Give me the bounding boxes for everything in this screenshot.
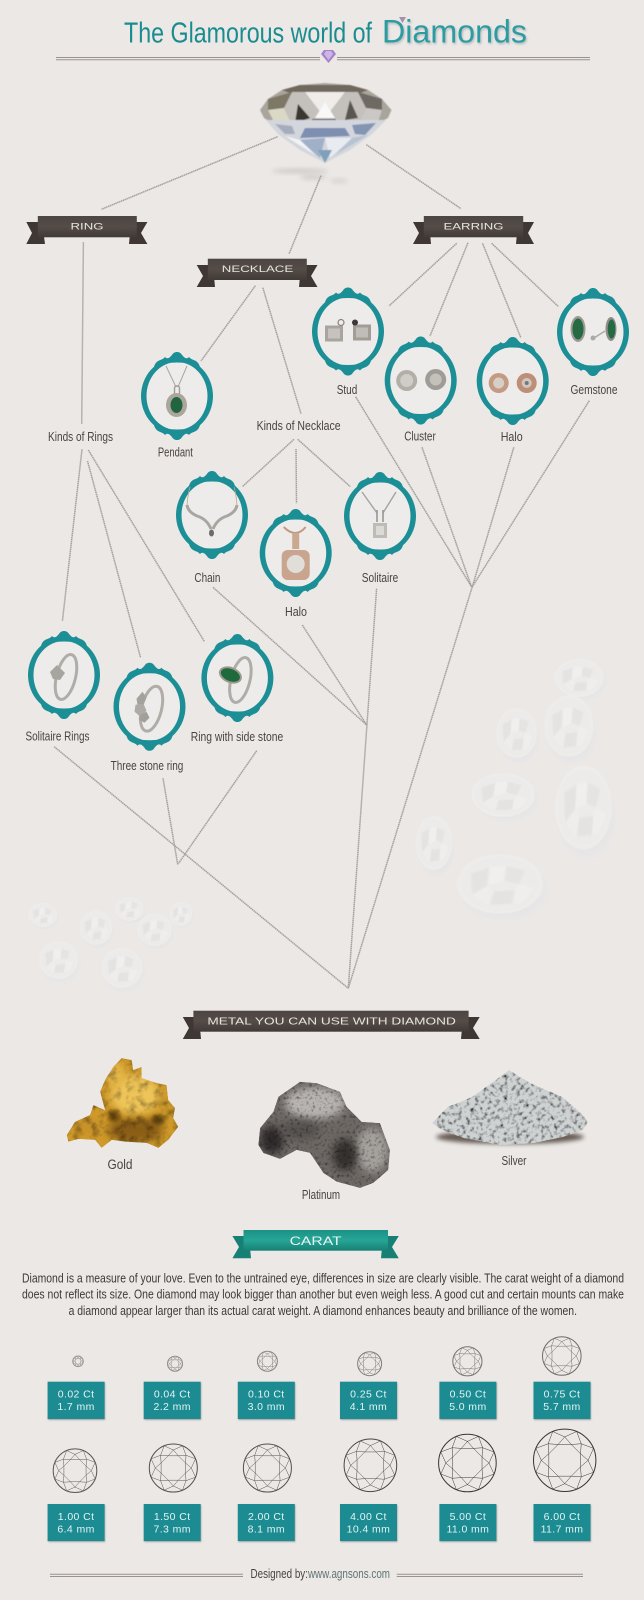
carat boxes, row 1: 5.7 mm: [543, 1401, 581, 1413]
banner: necklace: [197, 259, 318, 287]
label: gemstone: Gemstone: [570, 383, 618, 397]
carat boxes, row 1: 0.75 Ct: [544, 1388, 580, 1400]
carat boxes, row 1: 0.02 Ct: [58, 1388, 94, 1400]
connector lines: [54, 137, 589, 988]
main diamond image: [260, 83, 392, 184]
diamond cut size chart, row 1: [73, 1337, 581, 1376]
carat boxes, row 1: 4.1 mm: [350, 1401, 387, 1413]
carat boxes, row 2: [48, 1504, 591, 1541]
label: solitaire: Solitaire: [362, 571, 398, 585]
carat boxes, row 2: 11.7 mm: [541, 1524, 583, 1536]
label: solitaire rings: Solitaire Rings: [26, 730, 90, 744]
banner: ring: [26, 216, 147, 244]
carat boxes, row 2: 10.4 mm: [347, 1524, 390, 1536]
frame: solitaire ring: [28, 631, 100, 719]
metal: silver pile: [432, 1070, 588, 1145]
carat boxes, row 1: 3.0 mm: [248, 1401, 285, 1413]
banner: carat: [232, 1230, 399, 1258]
label: pendant: Pendant: [158, 446, 193, 460]
label: platinum: Platinum: [302, 1188, 340, 1202]
carat boxes, row 1: 0.50 Ct: [450, 1388, 486, 1400]
frame: gemstone earrings: [557, 288, 629, 376]
faded diamonds: left group: [29, 897, 193, 991]
carat boxes, row 2: 4.00 Ct: [350, 1511, 387, 1523]
label: chain: Chain: [194, 571, 220, 585]
frame: solitaire necklace: [344, 472, 416, 560]
carat boxes, row 1: 2.2 mm: [153, 1401, 191, 1413]
frame: stud earrings: [312, 288, 384, 376]
carat boxes, row 2: 5.00 Ct: [450, 1511, 486, 1523]
title: [124, 13, 527, 49]
title: The Glamorous world of: [124, 17, 372, 49]
frame: halo earrings: [477, 337, 549, 425]
label: earring halo: Halo: [501, 430, 523, 444]
banner: necklace: NECKLACE: [222, 264, 293, 275]
label: necklace halo: Halo: [285, 605, 307, 619]
frame: ring with side stone: [201, 634, 273, 722]
label: kinds of rings: Kinds of Rings: [48, 430, 113, 444]
carat boxes, row 2: 7.3 mm: [153, 1524, 191, 1536]
banner: earring: [413, 216, 534, 244]
carat boxes, row 2: 6.4 mm: [57, 1524, 95, 1536]
metal: platinum rock: [258, 1082, 390, 1188]
title: Diamonds: [382, 13, 527, 49]
faded diamonds: right group: [416, 660, 614, 919]
banner: earring: EARRING: [444, 222, 504, 232]
label: silver: Silver: [502, 1154, 526, 1168]
carat boxes, row 2: 6.00 Ct: [544, 1511, 580, 1523]
label: gold: Gold: [108, 1157, 132, 1172]
carat boxes, row 2: 2.00 Ct: [248, 1511, 285, 1523]
label: kinds of necklace: Kinds of Necklace: [257, 419, 341, 433]
footer credit: Designed by:www.agnsons.com: [250, 1567, 390, 1581]
frame: halo necklace: [260, 509, 332, 597]
label: stud: Stud: [337, 383, 357, 397]
banner: metal you can use with diamond: METAL YOU CAN USE WITH DIAMOND: [207, 1016, 456, 1028]
carat boxes, row 2: 8.1 mm: [248, 1524, 285, 1536]
icon: amethyst gem: [321, 50, 336, 63]
carat boxes, row 2: 1.50 Ct: [154, 1511, 191, 1523]
title rule: [56, 58, 590, 60]
carat paragraph: [22, 1272, 624, 1318]
carat boxes, row 1: [48, 1382, 591, 1419]
banner: carat: CARAT: [290, 1236, 342, 1248]
carat boxes, row 1: 0.04 Ct: [154, 1388, 191, 1400]
carat boxes, row 1: 5.0 mm: [449, 1401, 487, 1413]
carat boxes, row 1: 0.10 Ct: [248, 1388, 285, 1400]
frame: three stone ring: [114, 663, 186, 751]
banner: metal you can use with diamond: [183, 1011, 480, 1039]
diamond cut size chart, row 2: [53, 1429, 596, 1492]
label: ring with side stone: Ring with side stone: [191, 730, 283, 744]
carat boxes, row 1: 1.7 mm: [57, 1401, 95, 1413]
frame: pendant: [141, 352, 213, 440]
carat boxes, row 2: 1.00 Ct: [58, 1511, 94, 1523]
metal: gold nugget: [66, 1058, 178, 1148]
frame: cluster earrings: [385, 336, 457, 424]
icon: small gem on the i of Diamonds: [399, 17, 406, 23]
frame: chain necklace: [176, 471, 248, 559]
carat boxes, row 1: 0.25 Ct: [350, 1388, 387, 1400]
label: cluster: Cluster: [404, 430, 436, 444]
carat boxes, row 2: 11.0 mm: [446, 1524, 489, 1536]
label: three stone ring: Three stone ring: [111, 759, 183, 773]
banner: ring: RING: [70, 222, 104, 232]
